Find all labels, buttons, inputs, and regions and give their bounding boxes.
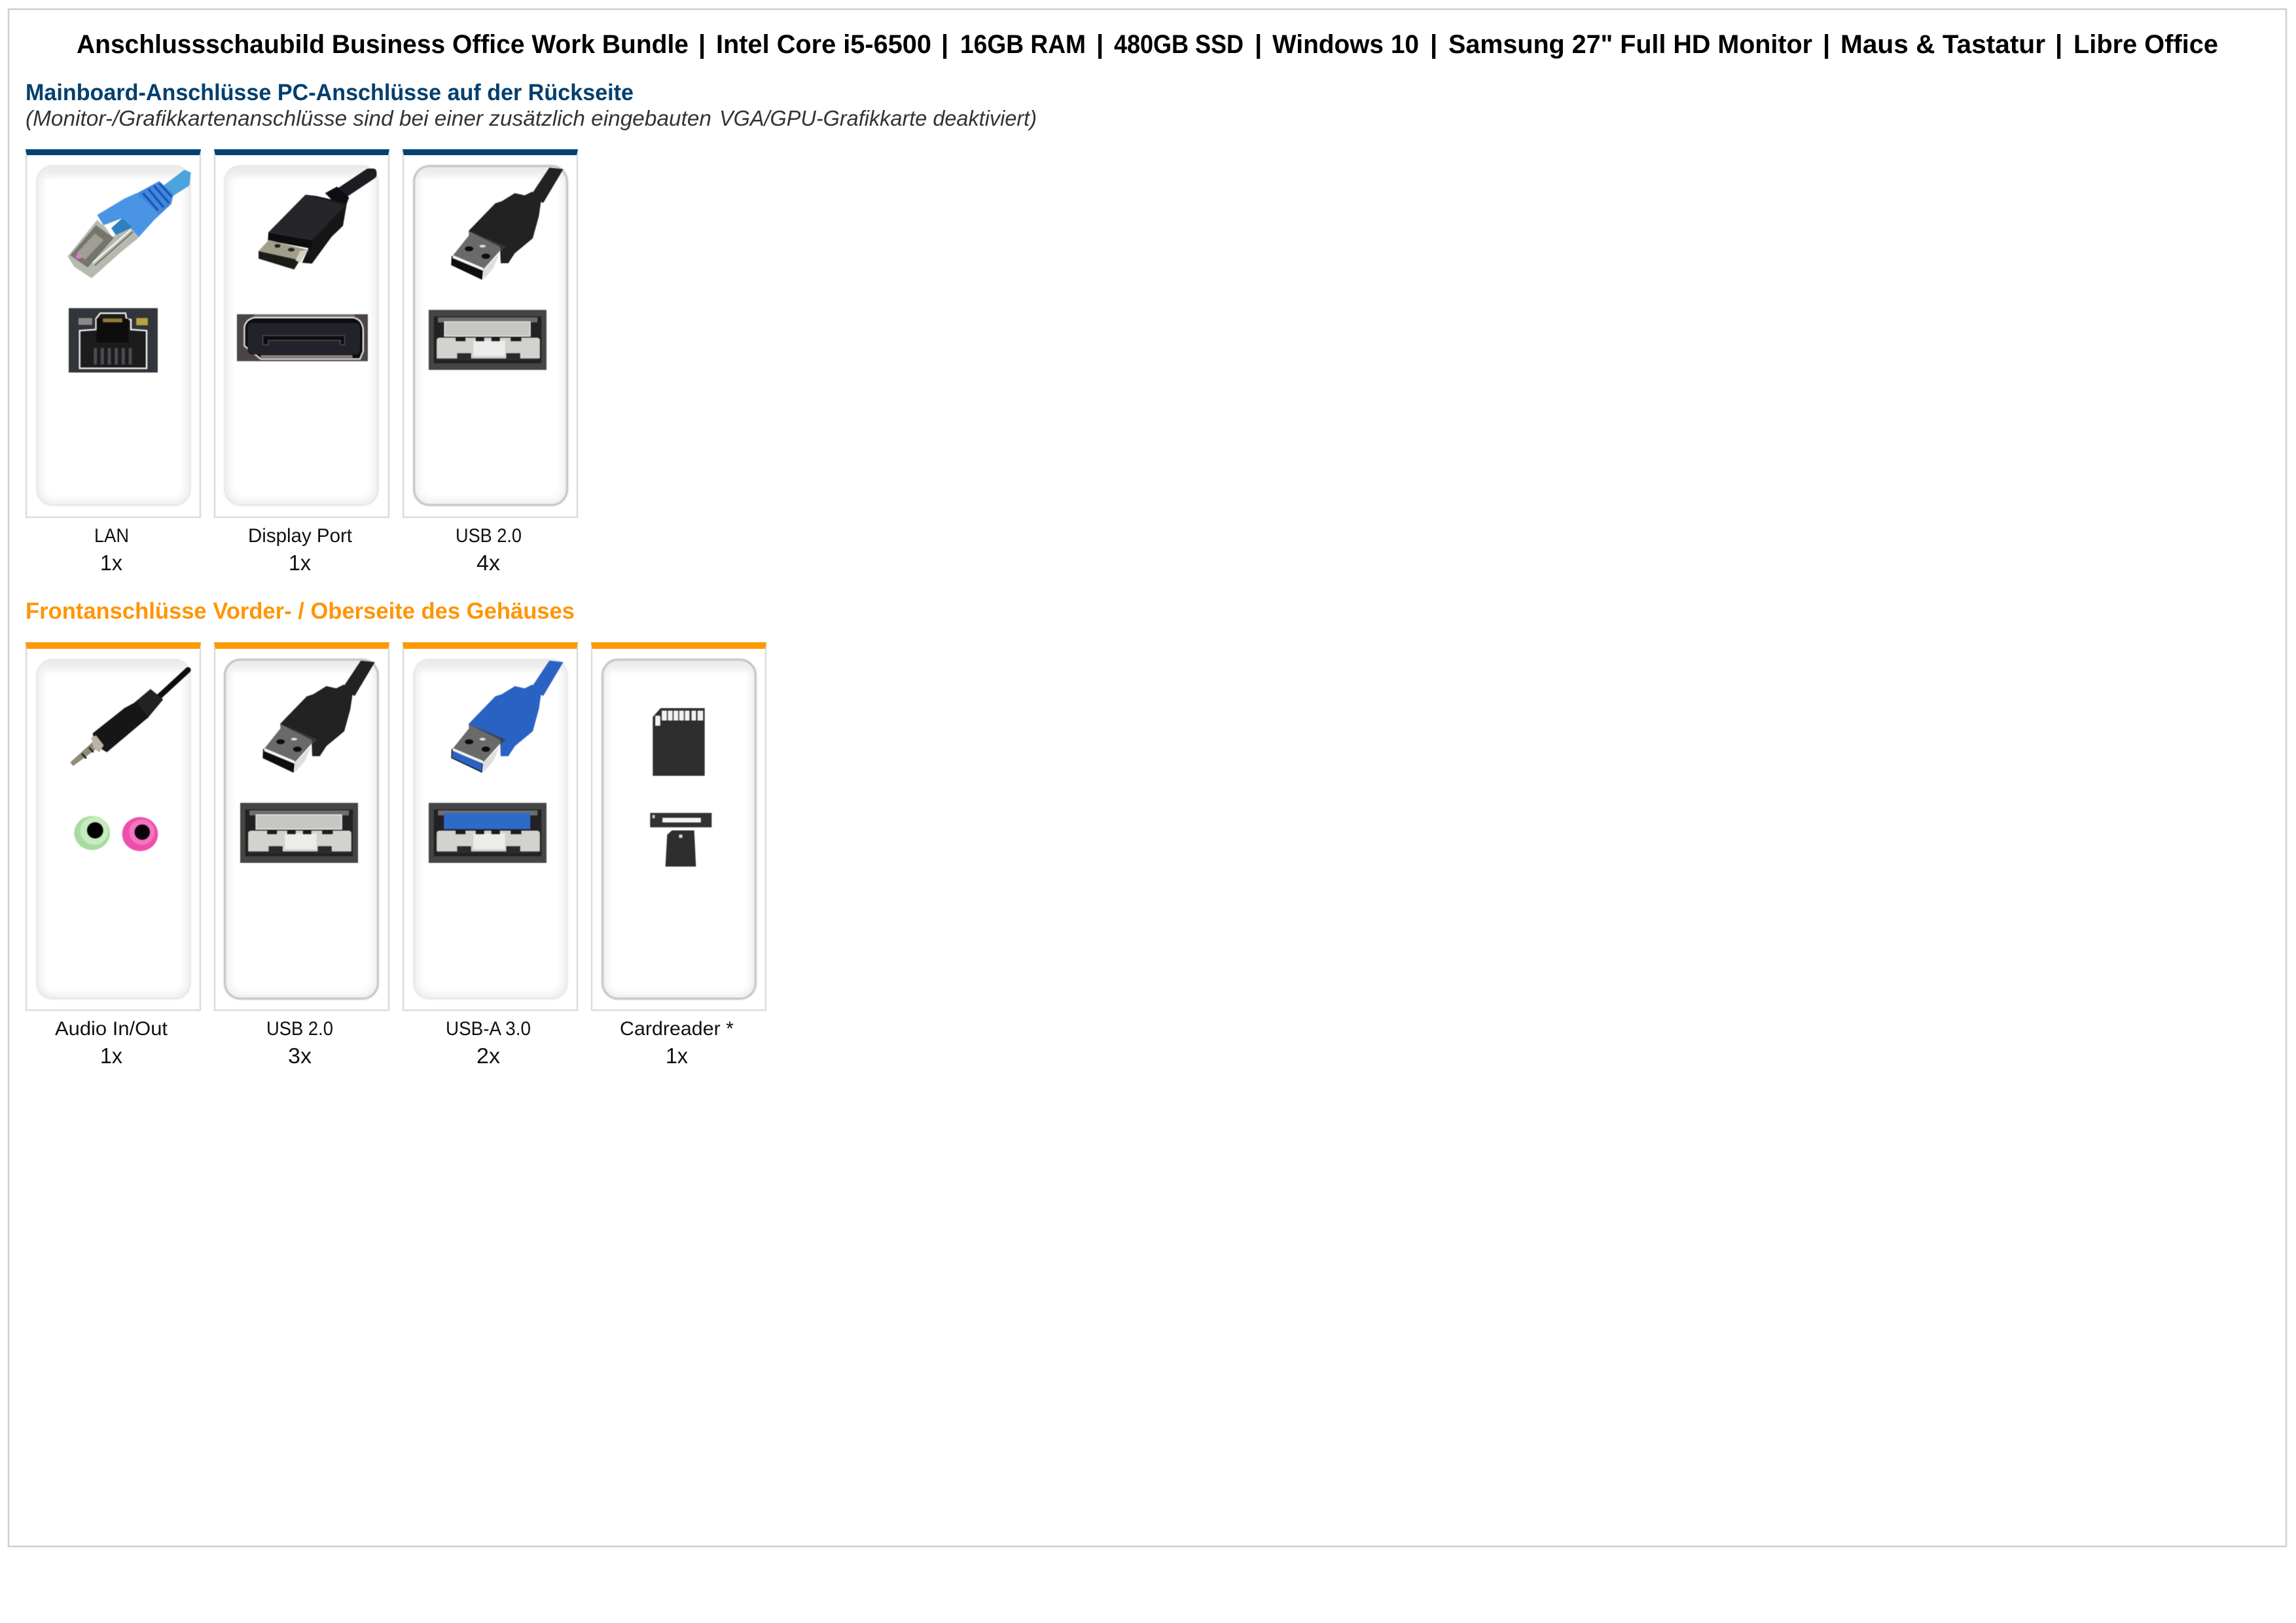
title xyxy=(77,30,2218,59)
count: USB 2.0 front: 3x xyxy=(288,1044,312,1068)
heading: mainboard ports: Mainboard-Anschlüsse PC-Anschlüsse auf der Rückseite xyxy=(26,80,634,105)
icon: USB 2.0 plug xyxy=(451,168,564,280)
label: USB 2.0 front: USB 2.0 xyxy=(266,1018,333,1040)
title: Maus & Tastatur xyxy=(1840,30,2045,59)
panel: Display Port xyxy=(214,149,389,575)
panel: USB 2.0 front xyxy=(214,642,389,1068)
title: | xyxy=(1096,30,1103,59)
count: Cardreader: 1x xyxy=(666,1044,688,1068)
title: 480GB SSD xyxy=(1114,30,1244,59)
title: Anschlussschaubild Business Office Work Bundle xyxy=(77,30,689,59)
note: graphics card ports: VGA/GPU-Grafikkarte deaktiviert) xyxy=(719,106,1037,130)
icon: USB 2.0 socket xyxy=(429,310,547,370)
title: | xyxy=(698,30,706,59)
title: Intel Core i5-6500 xyxy=(716,30,931,59)
title: 16GB RAM xyxy=(960,30,1086,59)
label: USB-A 3.0: USB-A 3.0 xyxy=(446,1018,531,1040)
label: Cardreader: Cardreader * xyxy=(620,1018,734,1040)
panel: LAN xyxy=(26,149,201,575)
title: Libre Office xyxy=(2073,30,2218,59)
label: Display Port: Display Port xyxy=(248,525,353,547)
title: | xyxy=(941,30,948,59)
count: USB 2.0 rear: 4x xyxy=(476,551,501,575)
title: | xyxy=(1823,30,1830,59)
icon: SD card xyxy=(653,708,705,776)
icon: card slot xyxy=(650,813,711,867)
icon: audio plug xyxy=(70,670,188,766)
panel: USB-A 3.0 xyxy=(403,642,578,1068)
icon: Display Port plug xyxy=(259,173,371,270)
note: graphics card ports: (Monitor-/Grafikkartenanschlüsse sind bei einer zusätzlich eingebauten xyxy=(26,106,711,130)
panel: USB 2.0 rear xyxy=(403,149,578,575)
icon: LAN plug xyxy=(67,170,191,278)
title: | xyxy=(1255,30,1262,59)
icon: LAN socket xyxy=(69,308,158,373)
label: Audio In/Out: Audio In/Out xyxy=(55,1018,168,1040)
icon: USB 3.0 socket xyxy=(429,803,547,863)
icon: Display Port socket xyxy=(237,314,368,361)
count: Display Port: 1x xyxy=(289,551,311,575)
title: | xyxy=(2055,30,2062,59)
icon: USB 2.0 plug xyxy=(262,661,375,773)
count: Audio In/Out: 1x xyxy=(100,1044,122,1068)
note: graphics card ports xyxy=(26,106,1037,130)
count: LAN: 1x xyxy=(100,551,122,575)
label: USB 2.0 rear: USB 2.0 xyxy=(456,525,522,547)
label: LAN: LAN xyxy=(94,525,129,547)
icon: USB 3.0 plug xyxy=(451,661,564,773)
title: | xyxy=(1430,30,1437,59)
panel: Audio In/Out xyxy=(26,642,201,1068)
icon: audio jacks xyxy=(74,816,158,851)
title: Windows 10 xyxy=(1272,30,1419,59)
heading: front ports: Frontanschlüsse Vorder- / Oberseite des Gehäuses xyxy=(26,598,575,624)
icon: USB 2.0 socket xyxy=(240,803,358,863)
panel: Cardreader xyxy=(591,642,766,1068)
title: Samsung 27" Full HD Monitor xyxy=(1448,30,1812,59)
count: USB-A 3.0: 2x xyxy=(476,1044,501,1068)
